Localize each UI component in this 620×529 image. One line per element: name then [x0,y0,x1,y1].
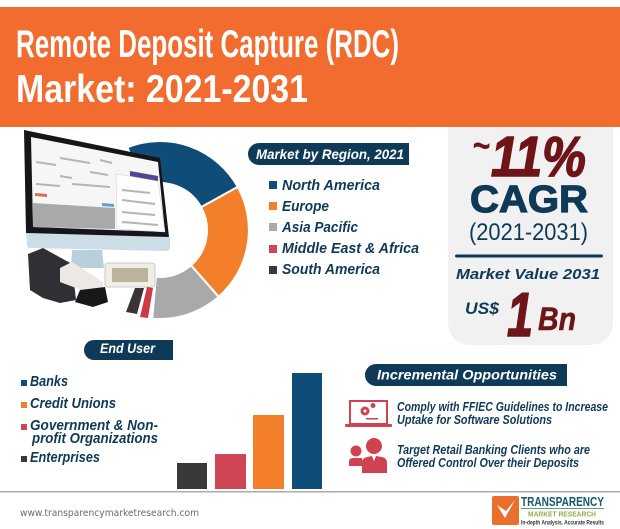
monitor screen [31,137,165,232]
CAGR percentage: ~ [472,124,490,168]
market value amount: US$ [465,299,500,318]
text: opportunity two [397,443,590,470]
heading: end user [84,340,173,360]
text: opportunity one [397,400,608,427]
title banner: Market: 2021-2031 [16,68,308,111]
text: opportunity two: Offered Control Over their Deposits [397,456,579,470]
illustration: monitor with check scanner [24,130,170,318]
market value amount: Bn [538,301,576,337]
donut chart: market by region [127,141,249,319]
logo subtitle: MARKET RESEARCH [528,510,596,518]
cards [126,288,144,314]
CAGR label: CAGR [470,179,588,221]
check scanner [28,248,76,303]
title banner: Remote Deposit Capture (RDC) [16,23,399,66]
heading: end user: End User [100,340,156,356]
logo: Transparency Market Research [492,495,605,526]
legend: end user: Government & Non- [30,417,158,434]
monitor stand [71,250,104,268]
text: opportunity two: Target Retail Banking Clients who are [397,443,590,457]
logo mark [492,496,519,525]
legend: end user: Credit Unions [30,395,116,412]
monitor bezel [24,130,169,237]
legend: end user: Enterprises [30,449,100,466]
heading: incremental opportunities: Incremental Opportunities [377,366,557,382]
website url: www.transparencymarketresearch.com [20,508,199,519]
market value label: Market Value 2031 [456,266,600,283]
legend: region: North America [282,177,380,194]
CAGR percentage: 11% [491,125,586,189]
legend: end user [21,373,158,466]
text: opportunity one: Uptake for Software Solutions [397,413,552,427]
legend: region: Asia Pacific [281,219,359,236]
market value amount [465,281,576,350]
title banner [0,7,620,127]
icon: people [349,438,387,473]
monitor chin [26,233,170,251]
market value amount: 1 [507,281,533,350]
legend: region: South America [282,261,380,278]
panel: CAGR and market value [448,124,613,350]
heading: market by region [248,143,409,165]
icon: laptop with gears [345,401,392,427]
CAGR period: (2021-2031) [469,219,588,246]
heading: incremental opportunities [365,364,567,386]
heading: market by region: Market by Region, 2021 [256,146,404,162]
legend: region [269,177,419,278]
legend: region: Middle East & Africa [282,240,419,257]
logo tagline: In-depth Analysis. Accurate Results [521,520,605,526]
bar chart: end user [177,373,322,489]
check document [105,263,155,287]
legend: end user: profit Organizations [31,430,158,447]
legend: region: Europe [282,198,329,215]
legend: end user: Banks [30,373,68,390]
